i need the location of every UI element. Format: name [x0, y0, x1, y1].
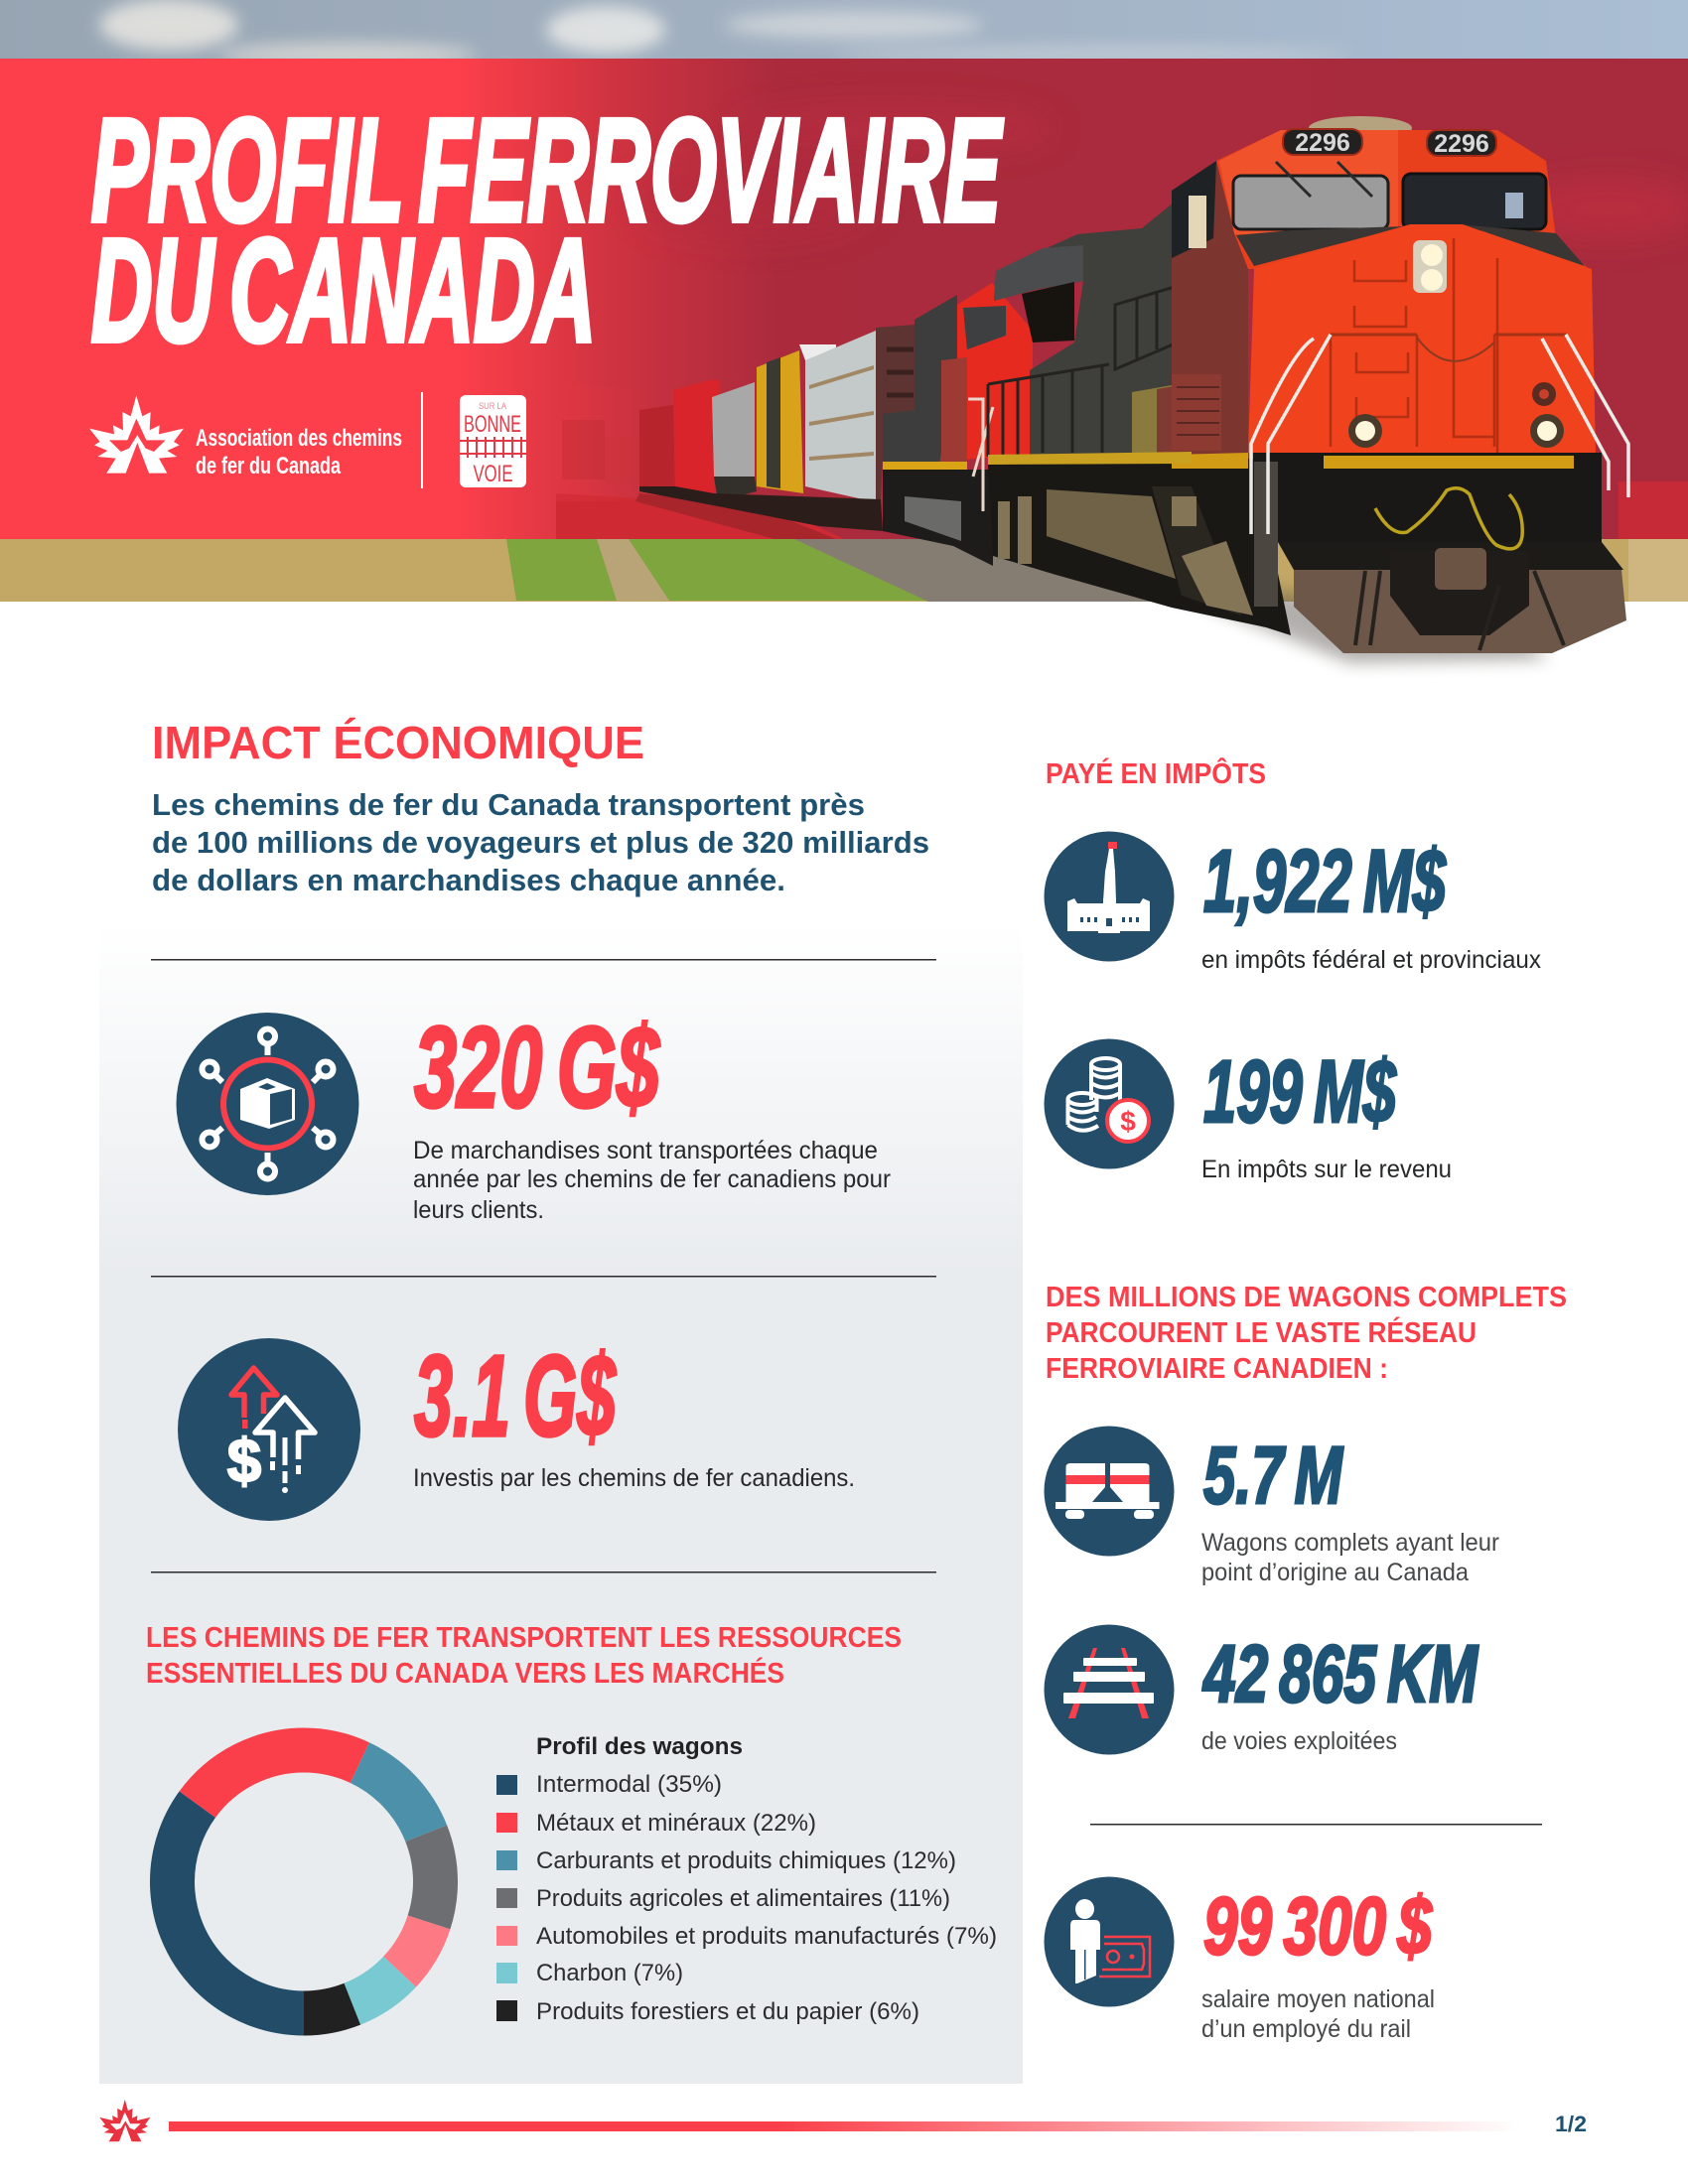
icon: box network [177, 1013, 359, 1195]
value: 1,922 M$ [1203, 831, 1447, 930]
organisation name: Association des chemins [196, 425, 402, 452]
number boards: 2296 [1434, 130, 1489, 158]
description: année par les chemins de fer canadiens pour [413, 1165, 891, 1193]
heading: paye en impots: PAYÉ EN IMPÔTS [1046, 756, 1266, 790]
title [91, 89, 1003, 372]
description [1201, 1985, 1435, 2043]
value: 3.1 G$ [414, 1331, 617, 1460]
headlights [1348, 240, 1564, 448]
icon: railway track [1045, 1624, 1174, 1755]
heading: des millions de wagons: DES MILLIONS DE WAGONS COMPLETS [1046, 1282, 1567, 1313]
title: DU CANADA [91, 209, 596, 372]
number boards: 2296 [1295, 129, 1350, 157]
intro paragraph: de dollars en marchandises chaque année. [152, 863, 785, 897]
description: Wagons complets ayant leur [1201, 1529, 1499, 1557]
lower front, stripe and pilot [988, 452, 1626, 653]
icon: rising investment arrows [178, 1338, 360, 1521]
heading: resources: ESSENTIELLES DU CANADA VERS LES MARCHÉS [146, 1656, 784, 1690]
description: salaire moyen national [1201, 1985, 1435, 2013]
legend item: carburants: Carburants et produits chimiques (12%) [536, 1847, 956, 1874]
legend item: charbon: Charbon (7%) [536, 1960, 683, 1986]
black collar [1236, 224, 1585, 266]
running gear [988, 459, 1291, 635]
stat: 1,922 M$ [1045, 831, 1541, 974]
heading: resources: LES CHEMINS DE FER TRANSPORTENT LES RESSOURCES [146, 1622, 902, 1654]
stat: 5.7 M [1045, 1426, 1499, 1586]
icon: employee and banknote [1045, 1876, 1174, 2007]
description [413, 1137, 891, 1224]
train photo illustration [556, 116, 1628, 663]
logo: Sur la bonne voie: SUR LA [479, 401, 506, 411]
legend item: agricoles: Produits agricoles et alimentaires (11%) [536, 1885, 950, 1912]
icon: coin stacks: $ [1120, 1106, 1136, 1137]
heading: resources [146, 1622, 902, 1690]
legend [496, 1733, 997, 2025]
legend item: automobiles: Automobiles et produits manufacturés (7%) [536, 1923, 997, 1950]
header banner [0, 0, 1688, 602]
cab side window [1172, 161, 1248, 455]
logo: Sur la bonne voie [460, 395, 526, 487]
logo: Sur la bonne voie: BONNE [464, 411, 521, 438]
long hood of lead locomotive [988, 162, 1231, 457]
stat: 320 G$ [177, 1003, 891, 1224]
windshields [1233, 162, 1546, 229]
icon: rising investment arrows: $ [227, 1428, 261, 1496]
description: De marchandises sont transportées chaque [413, 1137, 878, 1164]
cab and roof [1172, 116, 1589, 455]
organisation name [196, 425, 402, 479]
donut chart: profil des wagons [173, 1750, 435, 2013]
stat: 199 M$ [1045, 1038, 1452, 1183]
value: 320 G$ [414, 1003, 660, 1132]
intro paragraph: Les chemins de fer du Canada transportent près [152, 787, 865, 822]
description: d’un employé du rail [1201, 2015, 1411, 2043]
value: 99 300 $ [1203, 1881, 1433, 1972]
legend item: metaux: Métaux et minéraux (22%) [536, 1810, 816, 1837]
field strip [0, 539, 1688, 602]
footer [99, 2100, 1587, 2141]
title: PROFIL FERROVIAIRE [91, 89, 1003, 252]
heading: des millions de wagons: FERROVIAIRE CANADIEN : [1046, 1353, 1388, 1385]
heading: des millions de wagons: PARCOURENT LE VASTE RÉSEAU [1046, 1315, 1477, 1349]
wagons [562, 325, 914, 531]
stat: 3.1 G$ [178, 1331, 855, 1521]
icon: hopper wagon [1045, 1426, 1174, 1557]
panel: impact economique background [99, 923, 1023, 2084]
footer gradient bar [169, 2121, 1521, 2131]
nose of lead locomotive [1248, 224, 1596, 453]
icon: coin stacks [1045, 1038, 1174, 1169]
description: En impôts sur le revenu [1201, 1156, 1452, 1183]
icon: footer maple leaf [99, 2100, 151, 2141]
fade over distant wagons [556, 387, 645, 501]
heading: impact economique: IMPACT ÉCONOMIQUE [152, 717, 644, 768]
stat: 99 300 $ [1045, 1876, 1435, 2043]
description: point d’origine au Canada [1201, 1559, 1469, 1586]
value: 42 865 KM [1202, 1629, 1478, 1719]
value: 199 M$ [1203, 1041, 1397, 1141]
sky strip with clouds [0, 0, 1688, 67]
description: leurs clients. [413, 1196, 544, 1224]
page number: 1/2 [1555, 2112, 1587, 2136]
description: en impôts fédéral et provinciaux [1201, 946, 1541, 974]
handrails [1251, 335, 1628, 534]
organisation name: de fer du Canada [196, 453, 341, 479]
soft ground shadow [1182, 581, 1549, 663]
icon: maple leaf [89, 395, 184, 474]
icon: parliament [1045, 832, 1174, 961]
heading: des millions de wagons [1046, 1282, 1567, 1385]
red band [0, 59, 1688, 539]
logo: Association des chemins de fer du Canada [89, 395, 402, 479]
legend item: forestiers: Produits forestiers et du papier (6%) [536, 1998, 919, 2025]
legend title: Profil des wagons [536, 1733, 743, 1760]
intro paragraph: de 100 millions de voyageurs et plus de 320 milliards [152, 825, 929, 860]
description: de voies exploitées [1201, 1727, 1397, 1755]
value: 5.7 M [1203, 1431, 1343, 1521]
number boards [1283, 129, 1496, 158]
description [1201, 1529, 1499, 1586]
intro paragraph [152, 787, 929, 897]
logo: Sur la bonne voie: VOIE [473, 461, 512, 487]
legend item: intermodal: Intermodal (35%) [536, 1771, 722, 1798]
description: Investis par les chemins de fer canadiens. [413, 1464, 855, 1492]
stat: 42 865 KM [1045, 1624, 1478, 1755]
second locomotive [883, 283, 1033, 566]
